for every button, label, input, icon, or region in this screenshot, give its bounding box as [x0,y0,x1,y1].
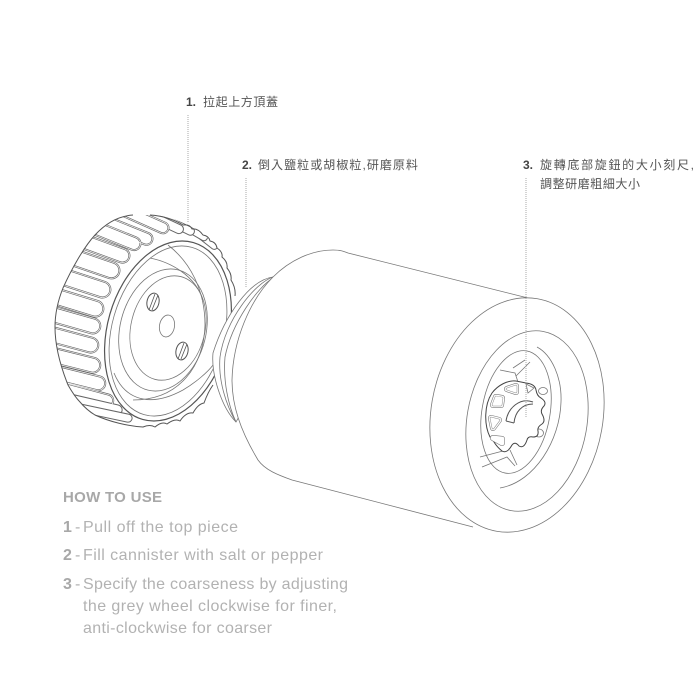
callout 3: adjust grind wheel: 3. [523,158,533,172]
step 2: - [75,547,80,564]
neck collar [213,277,273,422]
step 3: 3 [63,576,72,593]
base outer edge [412,284,622,546]
callout 1: pull off the top: 1. [186,95,196,109]
cap silhouette fill [55,215,236,427]
screw bottom [174,341,190,361]
callout 3: adjust grind wheel: 旋轉底部旋鈕的大小刻尺, [540,157,694,172]
step 3: anti-clockwise for coarser [83,620,273,637]
cap recess arcs [106,245,220,401]
wheel centre arc [506,401,533,423]
base second ring [452,321,602,521]
step 1: 1 [63,519,72,536]
grind adjustment wheel [486,381,545,452]
leader line 2 [245,178,247,288]
step 3: the grey wheel clockwise for finer, [83,598,337,615]
step 3 [63,576,348,637]
step 3: Specify the coarseness by adjusting [83,576,348,593]
recess ring [472,345,560,479]
cap silhouette outline [55,215,235,427]
cap face rim [84,226,252,436]
callout 3: adjust grind wheel [523,157,694,191]
canister body fill [232,250,560,527]
step 1: - [75,519,80,536]
callout 2: fill with salt or pepper: 2. [242,158,252,172]
callout 1: pull off the top: 拉起上方頂蓋 [203,94,278,109]
cap inner rim [90,232,246,430]
heading: HOW TO USE [63,489,162,506]
step 2: Fill cannister with salt or pepper [83,547,324,564]
step 3: - [75,576,80,593]
callout 2: fill with salt or pepper: 倒入鹽粒或胡椒粒,研磨原料 [258,157,418,172]
recess spokes [480,360,530,467]
base third ring arc [500,347,561,488]
how to use instructions [63,489,348,637]
leader line 1 [187,115,189,223]
cap grip ribs [56,215,218,423]
step 1: Pull off the top piece [83,519,238,536]
wheel finger holes [491,384,534,443]
leader line 3 [525,178,527,417]
step 2: 2 [63,547,72,564]
small lobes beside wheel [534,388,548,437]
top cap illustration [54,214,236,428]
centre hole [158,314,176,338]
canister body outline [232,250,540,527]
screw top [145,292,161,312]
grinder body illustration [213,178,622,546]
callout 3: adjust grind wheel: 調整研磨粗細大小 [540,176,640,191]
